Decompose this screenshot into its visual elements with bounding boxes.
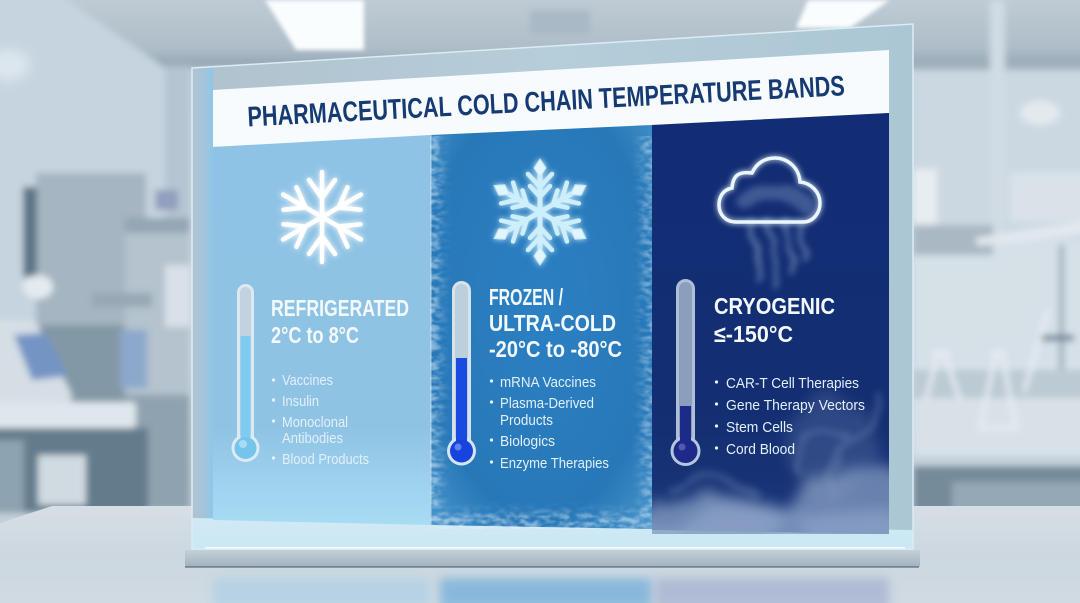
heading: frozen: -20°C to -80°C <box>489 336 622 362</box>
list: cryogenic products: Gene Therapy Vectors <box>726 397 865 414</box>
heading: frozen <box>489 284 622 362</box>
icon: ice crystal snowflake <box>488 159 592 265</box>
list: frozen products: Plasma-Derived <box>500 395 594 412</box>
thermometer: cryogenic <box>670 279 700 466</box>
heading: refrigerated: REFRIGERATED <box>271 295 409 321</box>
heading: refrigerated: 2°C to 8°C <box>271 322 359 348</box>
heading: refrigerated <box>271 295 409 348</box>
list: frozen products <box>490 374 609 472</box>
frost texture <box>424 125 656 530</box>
list: refrigerated products: Monoclonal <box>282 414 348 431</box>
thermometer: frozen <box>447 281 476 466</box>
icon: snowflake <box>277 172 367 262</box>
list: refrigerated products: Blood Products <box>282 451 369 468</box>
list: frozen products: mRNA Vaccines <box>500 374 596 391</box>
list: frozen products: Products <box>500 412 553 429</box>
panel: frozen ultra-cold <box>424 125 656 530</box>
panel: cryogenic <box>620 113 930 557</box>
icon: cloud with vapour <box>719 158 820 285</box>
heading: frozen: ULTRA-COLD <box>489 310 616 336</box>
list: refrigerated products: Vaccines <box>282 372 333 389</box>
heading: frozen: FROZEN / <box>489 284 563 310</box>
list: frozen products: Biologics <box>500 433 555 450</box>
smoke at bottom of panel <box>620 390 930 557</box>
list: cryogenic products: Cord Blood <box>726 441 795 458</box>
list: frozen products: Enzyme Therapies <box>500 455 609 472</box>
thermometer: refrigerated <box>232 284 260 462</box>
heading: cryogenic <box>714 293 835 347</box>
heading: cryogenic: CRYOGENIC <box>714 293 835 319</box>
list: refrigerated products: Antibodies <box>282 430 343 447</box>
title: PHARMACEUTICAL COLD CHAIN TEMPERATURE BANDS <box>247 70 846 133</box>
list: cryogenic products: Stem Cells <box>726 419 793 436</box>
panel: refrigerated <box>213 135 430 525</box>
list: cryogenic products: CAR-T Cell Therapies <box>726 375 859 392</box>
glass panel <box>192 24 913 549</box>
header banner <box>213 50 889 147</box>
glass display stand <box>185 550 920 603</box>
list: refrigerated products: Insulin <box>282 393 319 410</box>
heading: cryogenic: ≤-150°C <box>714 321 793 347</box>
list: cryogenic products <box>715 375 865 458</box>
list: refrigerated products <box>272 372 369 468</box>
